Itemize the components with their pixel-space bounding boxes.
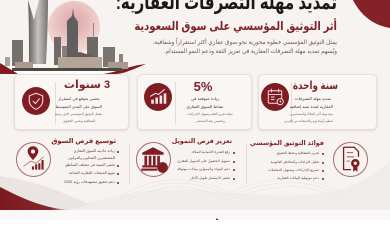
panel: 5 percent	[137, 74, 252, 130]
panel: financing	[136, 138, 235, 180]
icon: map pin and chart	[16, 142, 51, 177]
bullet list	[268, 151, 324, 180]
stat note: الشفافية ويحمي الحقوق.	[63, 119, 95, 123]
stat description: نشاط السوق العقاري	[186, 104, 224, 108]
panel: 3 years	[14, 74, 129, 130]
icon: certificate	[333, 142, 368, 177]
bullet list: تعزيز الشفافية وحفظ الحقوق	[276, 151, 319, 155]
stat description	[56, 96, 102, 109]
bullet list: دعم تحقيق مستهدفات رؤية 2030	[64, 180, 115, 184]
stat heading: 3 سنوات	[64, 79, 110, 91]
subtitle: أثر التوثيق المؤسسي على سوق السعودية	[134, 19, 337, 33]
bullet list: تسريع الإجراءات وتسهيل المعاملات	[268, 168, 319, 172]
icon: growth bars	[144, 83, 172, 111]
bullet list: تنويع المنتجات العقارية المتاحة	[69, 171, 115, 175]
bullet list: زيادة جاذبية السوق العقاري	[73, 149, 115, 153]
stat description: زيادة متوقعة في	[191, 96, 219, 101]
bullet list: دعم موثوقية البيانات العقارية	[277, 176, 319, 180]
stat note: نتيجة تعزيز الثقة وتسهيل الإجراءات	[187, 112, 233, 116]
icon: calendar	[261, 83, 289, 111]
intro text: يمثل التوثيق المؤسسي خطوة محورية نحو سوق عقاري أكثر استقراراً وشفافية،	[153, 40, 337, 46]
intro text	[153, 38, 337, 55]
stat heading: سنة واحدة	[293, 80, 338, 92]
panel: documentation benefits	[250, 140, 368, 180]
stat description: السوق على المدى المتوسط	[56, 104, 102, 108]
bullet list: للمستثمرين المحليين والدوليين	[68, 156, 115, 160]
bullet list: رفع القدرة الائتمانية للملاك	[191, 150, 230, 154]
stat description: العقارية لمدة سنة إضافية	[290, 104, 333, 108]
stat note	[55, 112, 102, 123]
skyline illustration	[5, 0, 128, 71]
stat note: وتحسين بيئة الاستثمار.	[195, 119, 225, 123]
panel heading: توسيع فرص السوق	[51, 138, 116, 145]
icon: bank	[136, 142, 171, 177]
bullet list: دعم البنوك والممولين ببيانات موثوقة	[177, 167, 230, 171]
stat description	[290, 96, 333, 109]
stat note: يتيح مهلة أكبر للملاك والمستثمرين	[290, 112, 333, 116]
stat description: تمديد مهلة التصرفات	[295, 96, 331, 101]
bullet list	[64, 149, 119, 184]
panel heading: فوائد التوثيق المؤسسي	[250, 140, 324, 147]
stat note: لتنظيم أوضاعهم والاستفادة من الفرص.	[283, 118, 333, 122]
stat description: تحسن متوقع في استقرار	[58, 96, 100, 101]
icon: shield	[22, 87, 50, 115]
bullet list: تسهيل الحصول على التمويل العقاري	[177, 159, 230, 163]
bullet list: تحفيز الاستثمار طويل الأجل	[190, 176, 230, 180]
bullet list: تحفيز التنمية في مختلف المناطق	[65, 163, 115, 167]
stat note: بفضل التوثيق المؤسسي الذي يرسخ	[55, 112, 102, 116]
stat description	[186, 96, 224, 109]
stat note	[187, 112, 233, 123]
bullet list	[177, 150, 235, 180]
panel: one year	[258, 74, 377, 130]
bullet list: تقليل النزاعات والمخاطر القانونية	[271, 160, 319, 164]
panel: market expansion	[16, 138, 119, 184]
stat heading: 5%	[194, 79, 212, 94]
panel heading: تعزيز فرص التمويل	[172, 138, 232, 145]
stat note	[283, 112, 333, 123]
intro text: ويُسهم تمديد مهلة التصرفات العقارية في تعزيز الثقة ودعم النمو المستدام.	[164, 49, 337, 55]
